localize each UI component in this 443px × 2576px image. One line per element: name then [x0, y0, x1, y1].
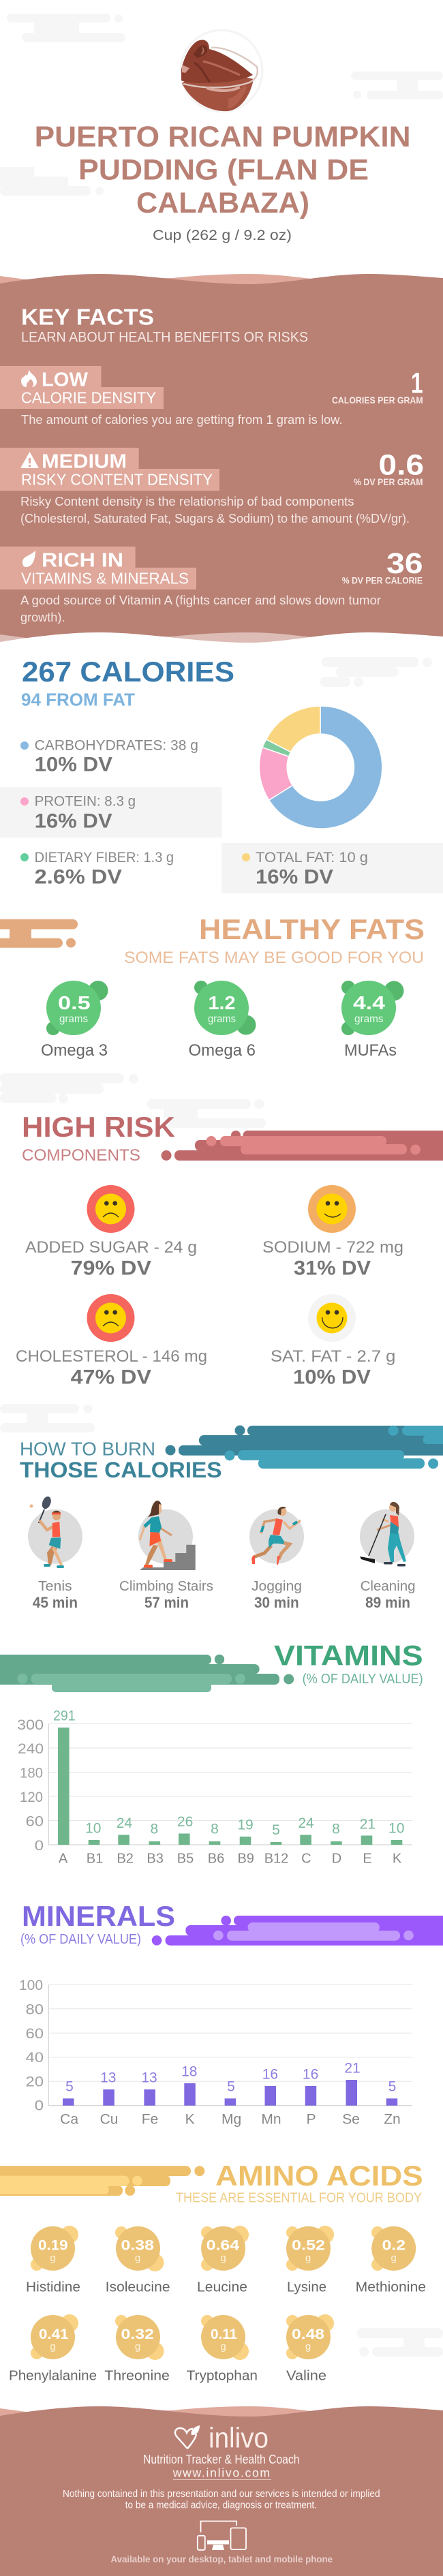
bar chart: vitamins: 291: [53, 1708, 76, 1723]
heading: healthy fats: HEALTHY FATS: [199, 913, 425, 945]
title: [35, 121, 411, 219]
disclaimer: to be a medical advice, diagnosis or treatment.: [125, 2500, 317, 2511]
badge: valine: 0.48: [292, 2327, 324, 2342]
item: cholesterol: [16, 1294, 207, 1389]
bar chart: minerals: 13: [100, 2070, 116, 2086]
item: saturated fat: [271, 1294, 395, 1389]
activity: tennis: Tenis: [38, 1579, 72, 1594]
bar chart: minerals: Fe: [142, 2112, 158, 2128]
icon: pudding in glass bowl: [180, 29, 263, 113]
bar chart: minerals: Mg: [222, 2112, 241, 2128]
activity: cleaning: 89 min: [365, 1594, 410, 1611]
activity: climbing stairs: 57 min: [144, 1594, 189, 1611]
badge: lysine: g: [305, 2252, 311, 2264]
badge: omega 3: 0.5: [58, 992, 91, 1013]
fact: rich in vitamins and minerals: growth).: [20, 610, 65, 624]
badge: tryptophan: g: [220, 2341, 226, 2352]
badge: histidine: 0.19: [38, 2238, 68, 2254]
badge: isoleucine: 0.38: [121, 2238, 154, 2254]
bar chart: minerals: Se: [342, 2112, 360, 2128]
bar chart: vitamins: D: [332, 1851, 341, 1866]
stat: total fat: 16% DV: [256, 866, 333, 889]
badge: methionine: 0.2: [382, 2238, 406, 2254]
bar chart: vitamins: 8: [151, 1822, 158, 1837]
badge: mufas: MUFAs: [344, 1041, 397, 1060]
fact: rich in vitamins and minerals: [0, 547, 423, 624]
badge: omega 3: grams: [59, 1013, 88, 1025]
fact: medium risky content density: 0.6: [379, 449, 424, 482]
activity: tennis: [28, 1495, 82, 1611]
badge: mufas: grams: [354, 1013, 384, 1025]
bar chart: vitamins: 5: [272, 1822, 280, 1838]
item: cholesterol: 47% DV: [71, 1366, 151, 1389]
serving size: Cup (262 g / 9.2 oz): [153, 227, 292, 243]
badge: isoleucine: [106, 2226, 170, 2295]
disclaimer: Nothing contained in this presentation and our services is intended or implied: [63, 2489, 380, 2500]
subheading: THESE ARE ESSENTIAL FOR YOUR BODY: [176, 2191, 422, 2206]
bar chart: minerals: Zn: [384, 2112, 401, 2128]
bar chart: vitamins: B2: [117, 1851, 134, 1866]
fact: low calorie density: 1: [411, 367, 423, 400]
badge: methionine: Methionine: [356, 2280, 426, 2295]
badge: tryptophan: Tryptophan: [187, 2369, 258, 2384]
decorative cloud banner: [0, 2166, 204, 2196]
bar chart: minerals: P: [306, 2112, 316, 2128]
badge: lysine: Lysine: [287, 2280, 326, 2295]
panel: footer: [0, 2406, 443, 2576]
item: sodium: [262, 1185, 403, 1280]
bar chart: vitamins: 120: [20, 1790, 43, 1805]
bar chart: vitamins: 24: [117, 1815, 132, 1831]
badge: valine: Valine: [286, 2369, 326, 2384]
bar chart: vitamins: 26: [177, 1814, 193, 1830]
fact: low calorie density: CALORIE DENSITY: [21, 389, 156, 407]
badge: phenylalanine: g: [50, 2341, 56, 2352]
fact: low calorie density: [0, 366, 423, 427]
subheading: from fat: 94 FROM FAT: [21, 690, 135, 710]
stat: carbohydrates: [20, 738, 198, 776]
bar chart: vitamins: B9: [237, 1851, 254, 1866]
logo: inlivo: [175, 2421, 269, 2453]
badge: omega 6: grams: [208, 1013, 236, 1025]
bar chart: vitamins: 10: [85, 1821, 101, 1837]
availability note: Available on your desktop, tablet and mobile phone: [110, 2554, 333, 2564]
badge: phenylalanine: Phenylalanine: [9, 2369, 97, 2384]
bar chart: vitamins: E: [363, 1851, 372, 1866]
fact: medium risky content density: RISKY CONTENT DENSITY: [21, 471, 213, 489]
fact: rich in vitamins and minerals: 36: [386, 547, 423, 580]
subheading: (% OF DAILY VALUE): [20, 1932, 141, 1947]
bar chart: vitamins: [17, 1708, 412, 1866]
fact: medium risky content density: [0, 448, 424, 525]
icon: devices: [198, 2521, 246, 2550]
heading: high risk: HIGH RISK: [22, 1111, 175, 1143]
badge: lysine: [286, 2226, 334, 2295]
bar chart: vitamins: C: [301, 1851, 311, 1866]
badge: leucine: Leucine: [197, 2280, 247, 2295]
stat: dietary fiber: [20, 850, 174, 889]
badge: tryptophan: [187, 2315, 258, 2384]
stat: protein: PROTEIN: 8.3 g: [35, 794, 136, 810]
title: PUERTO RICAN PUMPKIN: [35, 121, 411, 153]
bar chart: minerals: [19, 1978, 412, 2128]
bar chart: minerals: 60: [26, 2026, 44, 2042]
bar chart: vitamins: B5: [177, 1851, 194, 1866]
badge: leucine: 0.64: [207, 2238, 239, 2254]
bar chart: vitamins: K: [393, 1851, 402, 1866]
badge: phenylalanine: 0.41: [39, 2327, 69, 2342]
bar chart: vitamins: 8: [211, 1822, 219, 1837]
heading: amino acids: AMINO ACIDS: [215, 2160, 423, 2192]
subheading: components: COMPONENTS: [22, 1146, 140, 1165]
panel: vitamins: [0, 1639, 423, 1866]
item: added sugar: 79% DV: [71, 1257, 151, 1280]
fact: low calorie density: CALORIES PER GRAM: [332, 395, 423, 405]
item: saturated fat: 10% DV: [293, 1366, 371, 1389]
bar chart: minerals: K: [185, 2112, 195, 2128]
badge: mufas: [341, 981, 403, 1060]
panel: key facts: [0, 274, 443, 649]
heading: HOW TO BURN: [20, 1439, 155, 1460]
bar chart: vitamins: A: [59, 1851, 68, 1866]
bar chart: vitamins: 19: [237, 1817, 254, 1833]
badge: histidine: [26, 2226, 80, 2295]
badge: omega 3: Omega 3: [41, 1041, 108, 1060]
fact: rich in vitamins and minerals: VITAMINS & MINERALS: [21, 570, 189, 587]
bar chart: minerals: 100: [19, 1978, 43, 1993]
stat: dietary fiber: 2.6% DV: [35, 866, 122, 889]
badge: omega 6: Omega 6: [188, 1041, 256, 1060]
panel: high risk components: [16, 1111, 443, 1389]
badge: omega 6: [188, 981, 256, 1060]
bar chart: minerals: 5: [227, 2079, 235, 2094]
item: added sugar: [25, 1185, 197, 1280]
stat: dietary fiber: DIETARY FIBER: 1.3 g: [35, 850, 174, 865]
badge: leucine: g: [220, 2252, 226, 2264]
fact: rich in vitamins and minerals: % DV PER CALORIE: [342, 576, 423, 586]
item: saturated fat: SAT. FAT - 2.7 g: [271, 1347, 395, 1366]
item: sodium: 31% DV: [294, 1257, 371, 1280]
heading: THOSE CALORIES: [20, 1458, 222, 1482]
bar chart: vitamins: 300: [17, 1717, 44, 1733]
stat: protein: 16% DV: [35, 810, 112, 832]
website: www.inlivo.com: [172, 2466, 270, 2480]
bar chart: vitamins: 180: [20, 1765, 43, 1781]
activity: jogging: Jogging: [251, 1579, 302, 1594]
decorative cloud banner: [0, 1655, 294, 1692]
bar chart: vitamins: 10: [388, 1821, 404, 1837]
stat: total fat: TOTAL FAT: 10 g: [256, 850, 368, 865]
bar chart: vitamins: 21: [360, 1816, 376, 1832]
heading: vitamins: VITAMINS: [274, 1639, 423, 1671]
activity: climbing stairs: Climbing Stairs: [119, 1579, 213, 1594]
panel: how to burn those calories: [20, 1426, 443, 1611]
bar chart: vitamins: B1: [87, 1851, 103, 1866]
badge: isoleucine: Isoleucine: [106, 2280, 170, 2295]
bar chart: minerals: 40: [26, 2050, 44, 2066]
stat: carbohydrates: 10% DV: [35, 754, 112, 776]
panel: calories: [0, 656, 443, 893]
icon: flame: [21, 369, 37, 387]
badge: lysine: 0.52: [292, 2238, 325, 2254]
fact: low calorie density: LOW: [42, 369, 89, 391]
bar chart: minerals: 80: [26, 2002, 44, 2018]
bar chart: vitamins: 240: [18, 1741, 44, 1757]
tagline: Nutrition Tracker & Health Coach: [143, 2452, 300, 2466]
decorative cloud banner: [161, 1131, 443, 1161]
bar chart: minerals: Cu: [100, 2112, 118, 2128]
bar chart: minerals: 21: [344, 2061, 361, 2076]
bar chart: minerals: 0: [35, 2098, 44, 2114]
subheading: SOME FATS MAY BE GOOD FOR YOU: [124, 949, 424, 967]
fact: medium risky content density: % DV PER GRAM: [354, 477, 423, 487]
badge: omega 3: [41, 981, 108, 1060]
bar chart: minerals: 16: [303, 2067, 318, 2083]
badge: threonine: g: [135, 2341, 140, 2352]
disclaimer: [63, 2489, 380, 2511]
fact: rich in vitamins and minerals: RICH IN: [42, 550, 123, 572]
bar chart: minerals: 5: [388, 2079, 396, 2094]
badge: histidine: Histidine: [26, 2280, 80, 2295]
heading: 267 calories: 267 CALORIES: [22, 656, 234, 688]
panel: minerals: [19, 1900, 443, 2128]
fact: medium risky content density: MEDIUM: [42, 451, 127, 473]
badge: threonine: [104, 2315, 170, 2384]
bar chart: minerals: 20: [26, 2074, 44, 2090]
badge: threonine: Threonine: [104, 2369, 170, 2384]
bar chart: minerals: 13: [141, 2070, 157, 2086]
title: CALABAZA): [136, 187, 309, 219]
stat: total fat: [222, 843, 443, 893]
activity: jogging: [249, 1507, 304, 1611]
logo: inlivo: inlivo: [209, 2421, 269, 2453]
decorative cloud banner: [0, 919, 78, 948]
bar chart: minerals: 5: [65, 2079, 74, 2094]
donut chart: [259, 706, 382, 829]
activity: jogging: 30 min: [254, 1594, 299, 1611]
badge: leucine: [197, 2226, 249, 2295]
fact: low calorie density: The amount of calories you are getting from 1 gram is low.: [21, 412, 342, 427]
panel: healthy fats: [0, 913, 425, 1060]
subheading: (% OF DAILY VALUE): [303, 1672, 423, 1687]
item: sodium: SODIUM - 722 mg: [262, 1238, 403, 1257]
activity: cleaning: [360, 1502, 416, 1611]
stat: carbohydrates: CARBOHYDRATES: 38 g: [35, 738, 198, 754]
badge: tryptophan: 0.11: [211, 2327, 237, 2342]
stat: protein: [0, 787, 222, 838]
badge: threonine: 0.32: [121, 2327, 154, 2342]
decorative cloud banner: [165, 1426, 443, 1469]
bar chart: vitamins: B6: [208, 1851, 224, 1866]
bar chart: vitamins: B3: [147, 1851, 164, 1866]
fact: medium risky content density: (Cholesterol, Saturated Fat, Sugars & Sodium) to the amount (%DV/gr).: [20, 511, 410, 525]
bar chart: vitamins: 0: [35, 1838, 44, 1854]
icon: warning triangle: [20, 452, 39, 468]
subheading: LEARN ABOUT HEALTH BENEFITS OR RISKS: [21, 330, 308, 346]
activity: tennis: 45 min: [33, 1594, 78, 1611]
heading: minerals: MINERALS: [22, 1900, 175, 1932]
fact: medium risky content density: Risky Content density is the relationship of bad components: [20, 494, 354, 508]
bar chart: minerals: 18: [181, 2064, 197, 2080]
badge: methionine: g: [391, 2252, 397, 2264]
item: added sugar: ADDED SUGAR - 24 g: [25, 1238, 197, 1257]
heading: [20, 1439, 222, 1482]
badge: isoleucine: g: [135, 2252, 140, 2264]
badge: mufas: 4.4: [353, 992, 385, 1013]
fact: rich in vitamins and minerals: A good source of Vitamin A (fights cancer and slows down tumor: [20, 593, 381, 607]
item: cholesterol: CHOLESTEROL - 146 mg: [16, 1347, 207, 1366]
activity: climbing stairs: [119, 1501, 213, 1611]
bar chart: vitamins: 60: [26, 1813, 44, 1829]
bar chart: vitamins: 8: [332, 1822, 340, 1837]
badge: methionine: [356, 2226, 426, 2295]
bar chart: vitamins: B12: [264, 1851, 288, 1866]
badge: phenylalanine: [9, 2314, 97, 2384]
bar chart: minerals: 16: [262, 2067, 278, 2083]
heading: key facts: KEY FACTS: [21, 305, 154, 331]
decorative cloud banner: [152, 1916, 443, 1946]
activity: cleaning: Cleaning: [361, 1579, 416, 1594]
badge: valine: [286, 2314, 334, 2384]
icon: leaf: [22, 551, 35, 567]
badge: histidine: g: [50, 2252, 56, 2264]
panel: amino acids: [0, 2160, 426, 2384]
bar chart: vitamins: 24: [298, 1815, 314, 1831]
badge: valine: g: [305, 2341, 311, 2352]
title: PUDDING (FLAN DE: [78, 154, 369, 187]
badge: omega 6: 1.2: [209, 992, 236, 1013]
bar chart: minerals: Ca: [60, 2112, 78, 2128]
bar chart: minerals: Mn: [261, 2112, 281, 2128]
